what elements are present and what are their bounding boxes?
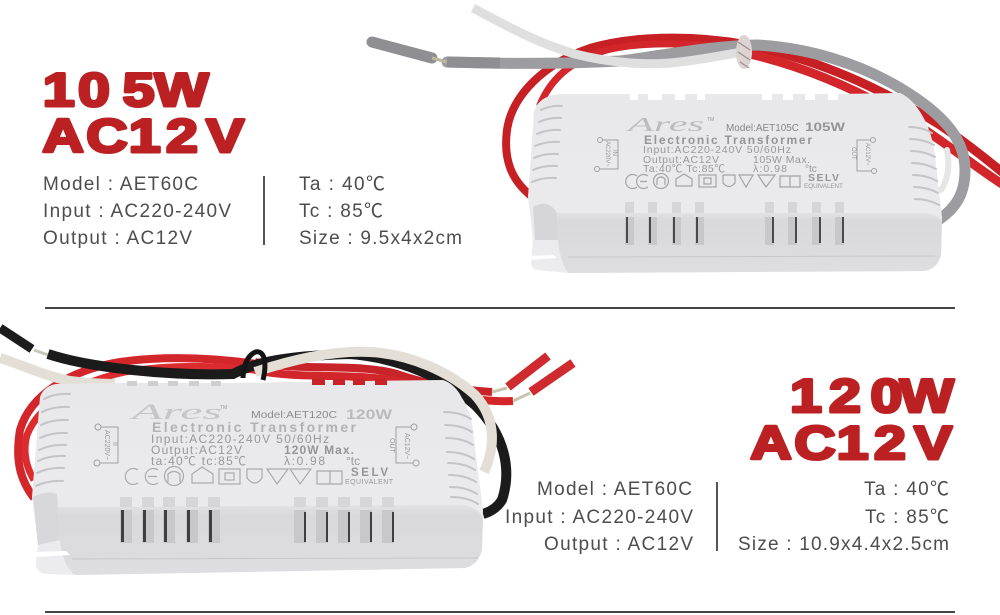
printed label 105W: TM	[707, 117, 714, 123]
printed label 105W: Ares	[624, 114, 704, 136]
section 105W: specification text: Ta : 40℃	[299, 174, 385, 195]
wires behind 105W body	[447, 38, 1000, 219]
printed label 120W: 120W Max.	[284, 443, 354, 457]
section 105W: headline: AC12V	[42, 111, 244, 163]
divider line top	[45, 307, 955, 309]
printed label 120W: EQUIVALENT	[345, 479, 394, 486]
section 120W: specification text: Ta : 40℃	[864, 479, 949, 500]
printed label 105W: SELV	[808, 172, 839, 184]
printed label 120W: OUT	[388, 438, 395, 454]
section 120W: specification text: Input : AC220-240V	[505, 507, 693, 528]
section 120W: specification text: Model : AET60C	[537, 479, 692, 500]
section 120W: specification text: Size : 10.9x4.4x2.5cm	[738, 534, 949, 555]
section 120W: headline	[750, 371, 954, 470]
section 105W: specification text: Tc : 85℃	[299, 201, 383, 222]
printed label 105W: Input:AC220-240V 50/60Hz	[643, 144, 791, 156]
section 105W: specification text: Model : AET60C	[43, 174, 198, 195]
section 105W: headline: 105W	[43, 65, 209, 117]
printed label 120W	[94, 399, 419, 486]
120W housing	[32, 379, 483, 575]
section 120W: headline: AC12V	[750, 418, 952, 470]
printed label 120W: II	[111, 442, 118, 446]
printed label 105W: °tc	[805, 164, 817, 175]
printed label 120W: λ:0.98	[284, 454, 325, 468]
section 120W: specification text: Output : AC12V	[544, 534, 693, 555]
section 105W: specification text: Size : 9.5x4x2cm	[299, 228, 462, 249]
printed label 120W: Model:AET120C	[251, 410, 337, 421]
printed label 105W: Model:AET105C	[726, 123, 799, 134]
printed label 105W: EQUIVALENT	[804, 183, 843, 190]
105W housing	[528, 93, 942, 273]
front vents	[120, 497, 394, 543]
printed label 105W: IN	[611, 150, 617, 156]
black wire	[0, 328, 32, 349]
printed label 105W	[594, 114, 876, 190]
printed label 120W: AC12V~	[403, 433, 410, 459]
printed label 120W: Electronic Transformer	[152, 419, 357, 435]
printed label 105W: 105W Max.	[753, 154, 810, 166]
printed label 120W: SELV	[351, 467, 388, 479]
printed label 105W: Ta:40℃ Tc:85℃	[643, 163, 726, 175]
printed label 120W: ta:40℃ tc:85℃	[151, 454, 246, 468]
section 105W: specification text: Output : AC12V	[43, 228, 192, 249]
gray wire stripped end	[372, 42, 500, 63]
printed label 105W: λ:0.98	[753, 163, 787, 175]
product photo: 105W transformer	[372, 8, 1000, 273]
cable tie	[736, 35, 752, 69]
section 120W: specification text: Tc : 85℃	[865, 507, 949, 528]
printed label 105W: AC220V~	[604, 141, 610, 167]
product photo: 120W transformer	[0, 328, 573, 575]
printed label 120W: 120W	[346, 406, 393, 422]
printed label 120W: Input:AC220-240V 50/60Hz	[151, 432, 329, 446]
certification icons 120W	[125, 466, 342, 486]
section 120W: headline: 120W	[790, 371, 954, 423]
printed label 120W: Ares	[127, 399, 222, 424]
section 105W: specification text: Input : AC220-240V	[43, 201, 231, 222]
printed label 120W: °tc	[346, 454, 360, 468]
printed label 105W: AC12V~	[864, 143, 870, 166]
front vents	[625, 202, 844, 245]
black wire main run	[48, 354, 506, 514]
printed label 120W: Output:AC12V	[151, 443, 242, 457]
white wire	[473, 8, 742, 64]
printed label 105W: OUT	[850, 147, 856, 160]
printed label 120W: AC220V~	[103, 430, 110, 460]
black cable tie	[243, 352, 265, 380]
printed label 105W: 105W	[805, 120, 846, 134]
printed label 105W: Output:AC12V	[643, 154, 719, 166]
white braided wire	[0, 352, 492, 472]
section 105W: headline	[42, 65, 244, 163]
red wires 120W	[18, 358, 513, 498]
section 105W: specification text	[43, 174, 462, 249]
side ridges	[36, 394, 478, 504]
certification icons 105W	[626, 174, 800, 189]
stripped black end	[34, 350, 48, 355]
section 120W: specification text	[505, 479, 949, 555]
printed label 105W: Electronic Transformer	[644, 133, 812, 147]
side ridges	[532, 106, 939, 205]
red terminals	[492, 356, 573, 401]
printed label 120W: TM	[220, 405, 227, 411]
divider line bottom	[45, 611, 955, 613]
